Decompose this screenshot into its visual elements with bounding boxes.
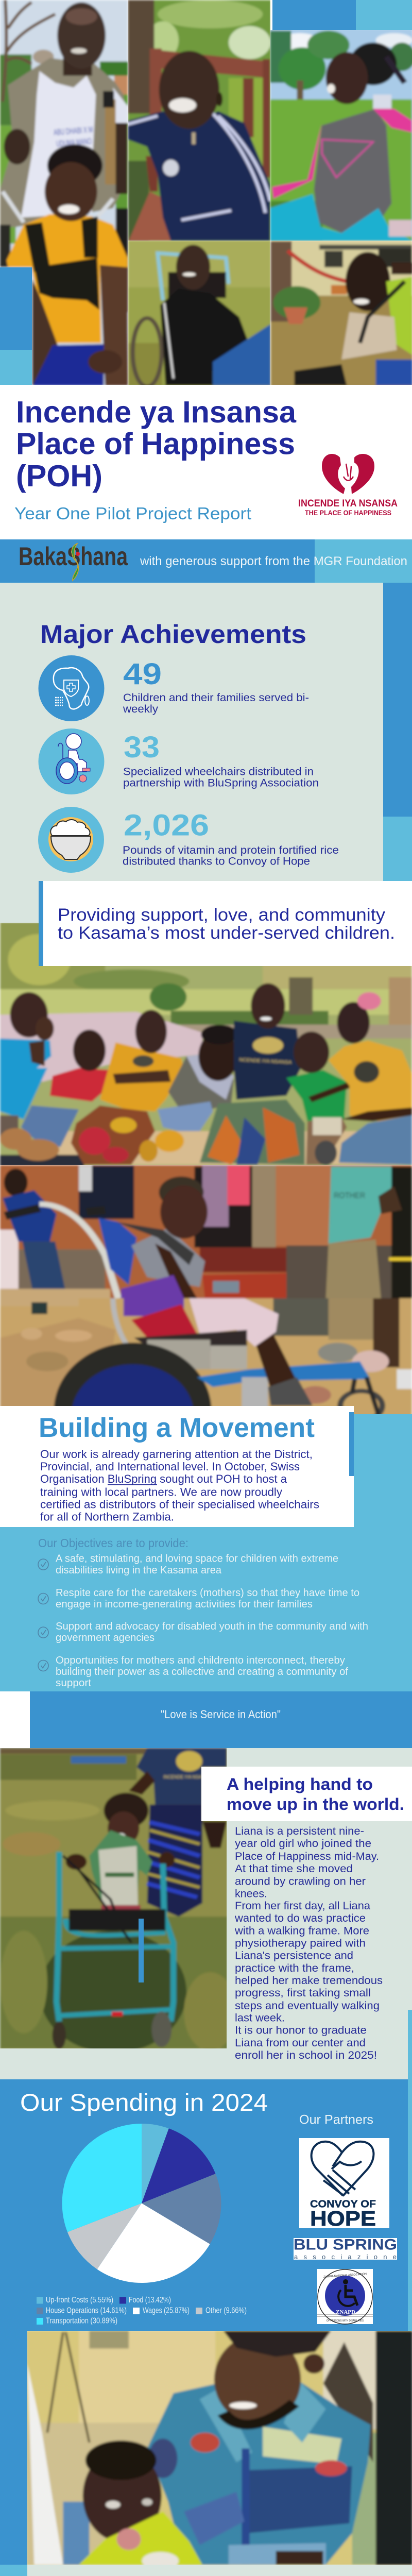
photo: smiling small boy in green seat in garden (271, 240, 412, 387)
logo: Blu Spring: BLU SPRING (294, 2236, 397, 2253)
text block: building a movement body: Provincial, and International level. In October, Swiss (40, 1460, 300, 1473)
text block: Liana story: Liana from our center and (235, 2037, 366, 2049)
text block: Liana story: Liana's persistence and (235, 1950, 353, 1962)
legend: spending: Food (13.42%) (129, 2296, 171, 2304)
logo: Incende Iya Nsansa heart: THE PLACE OF HAPPINESS (305, 509, 391, 517)
photo: man in printed shirt with toddler (26, 2330, 412, 2570)
text block: Liana story: Place of Happiness mid-May. (235, 1851, 379, 1862)
panel: Liana story background (0, 1748, 412, 2331)
section: wheelchair photo, building a movement and objectives (0, 1165, 412, 1748)
photo: girl in specialized wheelchair outside brick house (0, 1165, 412, 1414)
stat: 2,026 pounds of rice: 2,026 (124, 809, 209, 842)
objective 1: disabilities living in the Kasama area (56, 1565, 222, 1576)
logo: BakaShana: BakaShana (19, 542, 128, 571)
text block: building a movement body: Our work is already garnering attention at the District, (40, 1448, 313, 1461)
stat: 49 children: weekly (123, 703, 159, 715)
objective 2: Respite care for the caretakers (mothers) so that they have time to (56, 1587, 359, 1599)
photo: man with crutch and smiling girl in yellow shirt: UDUMA MANO (56, 136, 92, 148)
callout: a helping hand heading (201, 1767, 412, 1821)
stat: 33 wheelchairs: Specialized wheelchairs distributed in (123, 766, 314, 778)
section: closing photo, gratitude and handivan (0, 2331, 412, 2576)
callout: mission statement: to Kasama’s most under-served children. (58, 923, 395, 943)
title: Incende ya Insansa (16, 395, 297, 429)
heading: major achievements: Major Achievements (40, 620, 306, 649)
stat: 2,026 pounds of rice: Pounds of vitamin and protein fortified rice (123, 844, 339, 856)
photo: man with crutch and smiling girl in yellow shirt (0, 0, 128, 385)
logo: ZNAPD: ZNAPD (336, 2309, 355, 2315)
logo: Incende Iya Nsansa heart (298, 454, 398, 517)
stat: 49 children: 49 (123, 657, 162, 691)
stat: 49 children (123, 657, 309, 715)
panel: major achievements (0, 583, 412, 923)
text block: Liana story: year old girl who joined the (235, 1838, 371, 1850)
decorative corner blocks over top photos (0, 0, 412, 385)
logo: Blu Spring: associazione (294, 2253, 397, 2261)
text block: Liana story: Liana is a persistent nine- (235, 1825, 364, 1837)
panel: building a movement (0, 1406, 354, 1527)
legend: spending: Up-front Costs (5.55%) (46, 2296, 113, 2304)
objective 3 (38, 1621, 368, 1643)
heading: objectives: Our Objectives are to provide: (38, 1536, 188, 1550)
section: achievements and group photo (0, 583, 412, 1165)
objective 4: building their power as a collective and creating a community of (56, 1666, 348, 1677)
text block: building a movement body: Organisation BluSpring sought out POH to host a (40, 1472, 287, 1485)
objective 4: support (56, 1677, 91, 1689)
section: Liana story and spending (0, 1748, 412, 2331)
photo: Liana with walking frame on lawn (0, 1748, 236, 2053)
logo: Convoy of Hope: CONVOY OF (310, 2199, 376, 2210)
photo: children and caretaker on bench: NCENDE IYA NSANSA (239, 1057, 292, 1065)
legend: spending: House Operations (14.61%) (46, 2306, 127, 2315)
pie chart: spending (62, 2124, 221, 2283)
logo: ZNAPD: OF PERSONS WITH DISABILITIES (327, 2319, 364, 2323)
photo: children and caretaker on bench (0, 922, 412, 1166)
photo: man with crutch and smiling girl in yellow shirt: ABU DHABI X M (53, 125, 93, 137)
objective 4: Opportunities for mothers and childrento interconnect, thereby (56, 1655, 345, 1666)
text block: Liana story: practice with the frame, (235, 1962, 354, 1974)
title (16, 395, 297, 493)
heading: our partners: Our Partners (299, 2113, 373, 2127)
sponsor band (0, 539, 412, 583)
section: hero photos, title and sponsor band (0, 0, 412, 583)
text block: building a movement body (40, 1448, 319, 1523)
legend: spending: Transportation (30.89%) (46, 2316, 117, 2326)
text block: Liana story: with a walking frame. More (234, 1925, 369, 1937)
objective 1: A safe, stimulating, and loving space for children with extreme (56, 1553, 338, 1565)
objective 1 (38, 1553, 338, 1576)
light blue panel: objectives background (0, 1414, 412, 1691)
subtitle: Year One Pilot Project Report (14, 504, 251, 523)
heading: building a movement: Building a Movement (39, 1413, 315, 1443)
logo: Incende Iya Nsansa heart: INCENDE IYA NSANSA (298, 498, 398, 509)
text block: Liana story: knees. (235, 1888, 267, 1900)
logo: Blu Spring (294, 2236, 397, 2261)
stat: 33 wheelchairs: partnership with BluSpring Association (123, 777, 319, 789)
text block: Liana story: wanted to do was practice (234, 1912, 366, 1924)
callout: a helping hand heading: move up in the world. (227, 1795, 404, 1814)
text block: building a movement body: certified as distributors of their specialised wheelchairs (40, 1498, 319, 1511)
logo: BakaShana (19, 542, 128, 581)
callout: mission statement: Providing support, love, and community (58, 905, 385, 925)
stat: 2,026 pounds of rice: distributed thanks to Convoy of Hope (123, 856, 310, 868)
logo: ZNAPD (317, 2269, 373, 2324)
photo: girl in pink and grey superman top on lawn (270, 28, 412, 241)
logo: Convoy of Hope: HOPE (310, 2207, 376, 2230)
objective 2: engage in income-generating activities for their families (56, 1599, 313, 1610)
photo: young man reclining in blue wheelchair (128, 240, 271, 387)
callout: a helping hand heading: A helping hand to (227, 1775, 373, 1793)
panel: objectives (38, 1536, 368, 1689)
text block: Liana story: around by crawling on her (235, 1875, 366, 1888)
stat: 2,026 pounds of rice (123, 809, 339, 868)
logo: ZNAPD: ZAMBIA NATIONAL ASSOCIATION (323, 2273, 367, 2279)
title: Place of Happiness (16, 427, 295, 461)
photo: laughing boy in navy jacket on wooden chair (128, 0, 271, 241)
text block: Liana story: From her first day, all Liana (235, 1900, 370, 1912)
stat: 33 wheelchairs: 33 (124, 731, 160, 764)
text block: Liana story: progress, first taking small (235, 1987, 371, 1999)
icon: child in wheelchair (38, 728, 104, 794)
legend: spending (37, 2296, 247, 2326)
text block: Liana story: helped her make tremendous (235, 1975, 383, 1987)
stat: 33 wheelchairs (123, 731, 319, 789)
text block: Liana story: enroll her in school in 2025! (235, 2049, 377, 2061)
sponsor text: with generous support from the MGR Foundation (140, 554, 407, 568)
legend: spending: Wages (25.87%) (143, 2306, 190, 2315)
text block: Liana story: last week. (235, 2012, 285, 2024)
quote band: "Love is Service in Action" (161, 1708, 281, 1721)
panel: gratitude (0, 2565, 412, 2576)
blue margin beside photo (0, 2331, 27, 2565)
objective 2 (38, 1587, 359, 1610)
photo: Liana with walking frame on lawn: INCENDE IYA NSA (163, 1775, 202, 1780)
text block: Liana story: It is our honor to graduate (235, 2025, 367, 2037)
text block: Liana story: physiotherapy paired with (235, 1937, 366, 1950)
icon: rice bowl (38, 807, 104, 873)
legend: spending: Other (9.66%) (205, 2306, 247, 2315)
text block: building a movement body: for all of Northern Zambia. (40, 1511, 174, 1523)
logo: Convoy of Hope (299, 2138, 389, 2230)
icon: Africa and medical shield (38, 655, 104, 721)
objective 3: Support and advocacy for disabled youth in the community and with (56, 1621, 368, 1632)
stat: 49 children: Children and their families served bi- (123, 692, 309, 704)
objective 3: government agencies (56, 1632, 154, 1643)
text block: Liana story: steps and eventually walking (235, 2000, 380, 2012)
title: (POH) (16, 459, 102, 493)
bar on walking frame (139, 1919, 144, 1982)
text block: Liana story: At that time she moved (235, 1863, 353, 1875)
text block: Liana story (234, 1825, 383, 2061)
text block: building a movement body: training with local partners. We are now proudly (40, 1486, 282, 1498)
panel: spending in 2024 (0, 2079, 408, 2331)
objective 4 (38, 1655, 348, 1689)
quote band (0, 1691, 412, 1748)
photo: girl in specialized wheelchair outside brick house: ROTHER (334, 1191, 365, 1200)
callout: mission statement (39, 881, 412, 966)
heading: spending: Our Spending in 2024 (20, 2089, 268, 2116)
